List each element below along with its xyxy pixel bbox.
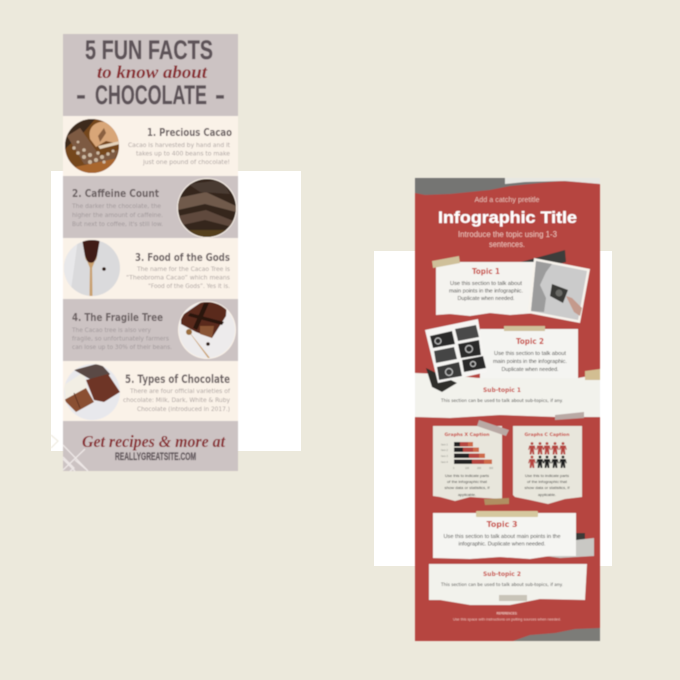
icon: chocolate bar photo	[178, 301, 236, 359]
text: types of chocolate: chocolate: Milk, Dark, White & Ruby	[123, 396, 230, 404]
bar chart: Item 1	[441, 444, 449, 446]
text: precious cacao: Cacao is harvested by hand and it	[128, 141, 230, 149]
text: food of the gods: 3. Food of the Gods	[135, 252, 230, 264]
bar chart: 300	[489, 467, 494, 470]
text: precious cacao: takes up to 400 beans to make	[136, 150, 230, 158]
pictogram chart	[528, 442, 567, 468]
text: fragile tree: 4. The Fragile Tree	[72, 312, 163, 324]
card: graphs C caption: of the infographic that	[527, 479, 568, 484]
card: graphs C caption: Graphs C Caption	[524, 432, 570, 438]
heading: chocolate: -	[215, 80, 225, 110]
text: types of chocolate: There are four official varieties of	[129, 387, 231, 395]
card: topic 3: Topic 3	[486, 520, 518, 529]
bar chart: Item 2	[441, 449, 449, 452]
footer text: recipes: Get recipes & more at	[82, 432, 226, 451]
text: fragile tree: can lose up to 30% of their beans.	[72, 343, 172, 351]
text: pretitle: Add a catchy pretitle	[474, 195, 540, 204]
text: references: Use this space with instructions on putting sources when needed.	[453, 618, 561, 622]
card: topic 2: Use this section to talk about	[494, 351, 567, 357]
card: graphs C caption: applicable.	[538, 492, 556, 497]
text: types of chocolate: Chocolate (introduced in 2017.)	[137, 405, 230, 413]
card: topic 1: Duplicate when needed.	[458, 296, 514, 302]
panel: chocolate infographic	[51, 34, 238, 471]
card: topic 1: main points in the infographic.	[449, 288, 523, 294]
icon: chocolate pieces photo	[63, 363, 121, 421]
panel: generic infographic template	[415, 178, 600, 641]
text: intro: sentences.	[489, 239, 525, 249]
card: graphs C caption: show data or statistics, if	[524, 485, 570, 490]
heading: 5 fun facts: 5 FUN FACTS	[85, 35, 213, 65]
card: topic 3: infographic. Duplicate when needed.	[458, 542, 546, 548]
card: sub-topic 2: Sub-topic 2	[483, 571, 521, 578]
card: graphs C caption: Use this to indicate parts	[525, 473, 569, 478]
text: food of the gods: The name for the Cacao Tree is	[136, 265, 231, 273]
text: precious cacao: just one pound of chocolate!	[142, 158, 230, 166]
text: fragile tree: The Cacao tree is also very	[71, 326, 151, 334]
top torn photo strip	[415, 178, 600, 195]
bar chart	[441, 442, 494, 470]
card: topic 2	[480, 326, 578, 378]
card: topic 1: Use this section to talk about	[450, 281, 523, 287]
text: caffeine count: higher the amount of caffeine.	[72, 211, 163, 219]
heading: to know about: to know about	[97, 62, 208, 82]
card: topic 1	[432, 250, 566, 316]
text: precious cacao	[128, 127, 232, 166]
footer text: website: REALLYGREATSITE.COM	[115, 451, 196, 463]
text: food of the gods: “Theobroma Cacao” which means	[126, 274, 231, 282]
text: types of chocolate: 5. Types of Chocolate	[125, 372, 230, 386]
white backdrop left	[51, 171, 301, 451]
text: fragile tree: fragile, so unfortunately farmers	[72, 334, 170, 342]
card: graphs X caption: applicable.	[458, 492, 476, 497]
bar chart: Item 4	[441, 461, 449, 464]
card: graphs X caption	[433, 420, 509, 505]
bar chart: 200	[477, 467, 482, 470]
card: topic 2: Topic 2	[516, 337, 544, 346]
card: graphs X caption: Graphs X Caption	[444, 432, 490, 438]
text: fragile tree	[71, 312, 172, 351]
icon: cacao beans photo	[63, 117, 121, 175]
bar chart: 0	[453, 467, 455, 470]
card: topic 3	[433, 511, 594, 559]
text: intro	[458, 229, 557, 249]
band: sub-topic 1	[415, 369, 600, 420]
card: topic 2: main points in the infographic.	[493, 359, 567, 365]
card: topic 1: Topic 1	[472, 267, 500, 276]
photo: hand holding camera	[528, 258, 590, 323]
card: sub-topic 2: This section can be used to talk about sub-topics, if any.	[440, 582, 563, 588]
text: food of the gods: “Food of the Gods”. Yes it is.	[148, 282, 230, 290]
bar chart: Item 3	[441, 455, 449, 458]
bottom torn photo strip	[513, 628, 600, 641]
text: caffeine count: 2. Caffeine Count	[72, 188, 159, 200]
card: sub-topic 2	[429, 564, 587, 605]
card: topic 3: Use this section to talk about main points in the	[444, 534, 560, 540]
white backdrop right	[374, 251, 612, 566]
card: graphs X caption: of the infographic that	[447, 479, 488, 484]
band: sub-topic 1: Sub-topic 1	[483, 387, 521, 394]
text: types of chocolate	[123, 372, 231, 413]
bar chart: 100	[465, 467, 470, 470]
text: precious cacao: 1. Precious Cacao	[147, 127, 232, 139]
heading: chocolate	[76, 80, 225, 110]
heading: chocolate: -	[76, 80, 86, 110]
text: intro: Introduce the topic using 1-3	[458, 229, 557, 239]
card: graphs C caption	[513, 426, 582, 504]
text: caffeine count: But next to coffee, it's still low.	[72, 220, 163, 228]
icon: chocolate on spoon photo	[63, 239, 121, 297]
text: references: REFERENCES:	[496, 612, 518, 616]
text: caffeine count	[71, 188, 163, 228]
icon: dark chocolate photo	[177, 178, 237, 240]
photo: vintage cameras	[425, 319, 487, 392]
card: graphs X caption: show data or statistics, if	[444, 485, 490, 490]
card: graphs X caption: Use this to indicate parts	[445, 473, 489, 478]
heading: chocolate: CHOCOLATE	[95, 80, 207, 110]
text: references	[453, 612, 561, 622]
title: Infographic Title	[438, 208, 577, 227]
text: caffeine count: The darker the chocolate, the	[71, 202, 161, 210]
text: food of the gods	[126, 252, 231, 290]
band: sub-topic 1: This section can be used to talk about sub-topics, if any.	[440, 398, 563, 404]
card: topic 2: Duplicate when needed.	[502, 367, 558, 373]
